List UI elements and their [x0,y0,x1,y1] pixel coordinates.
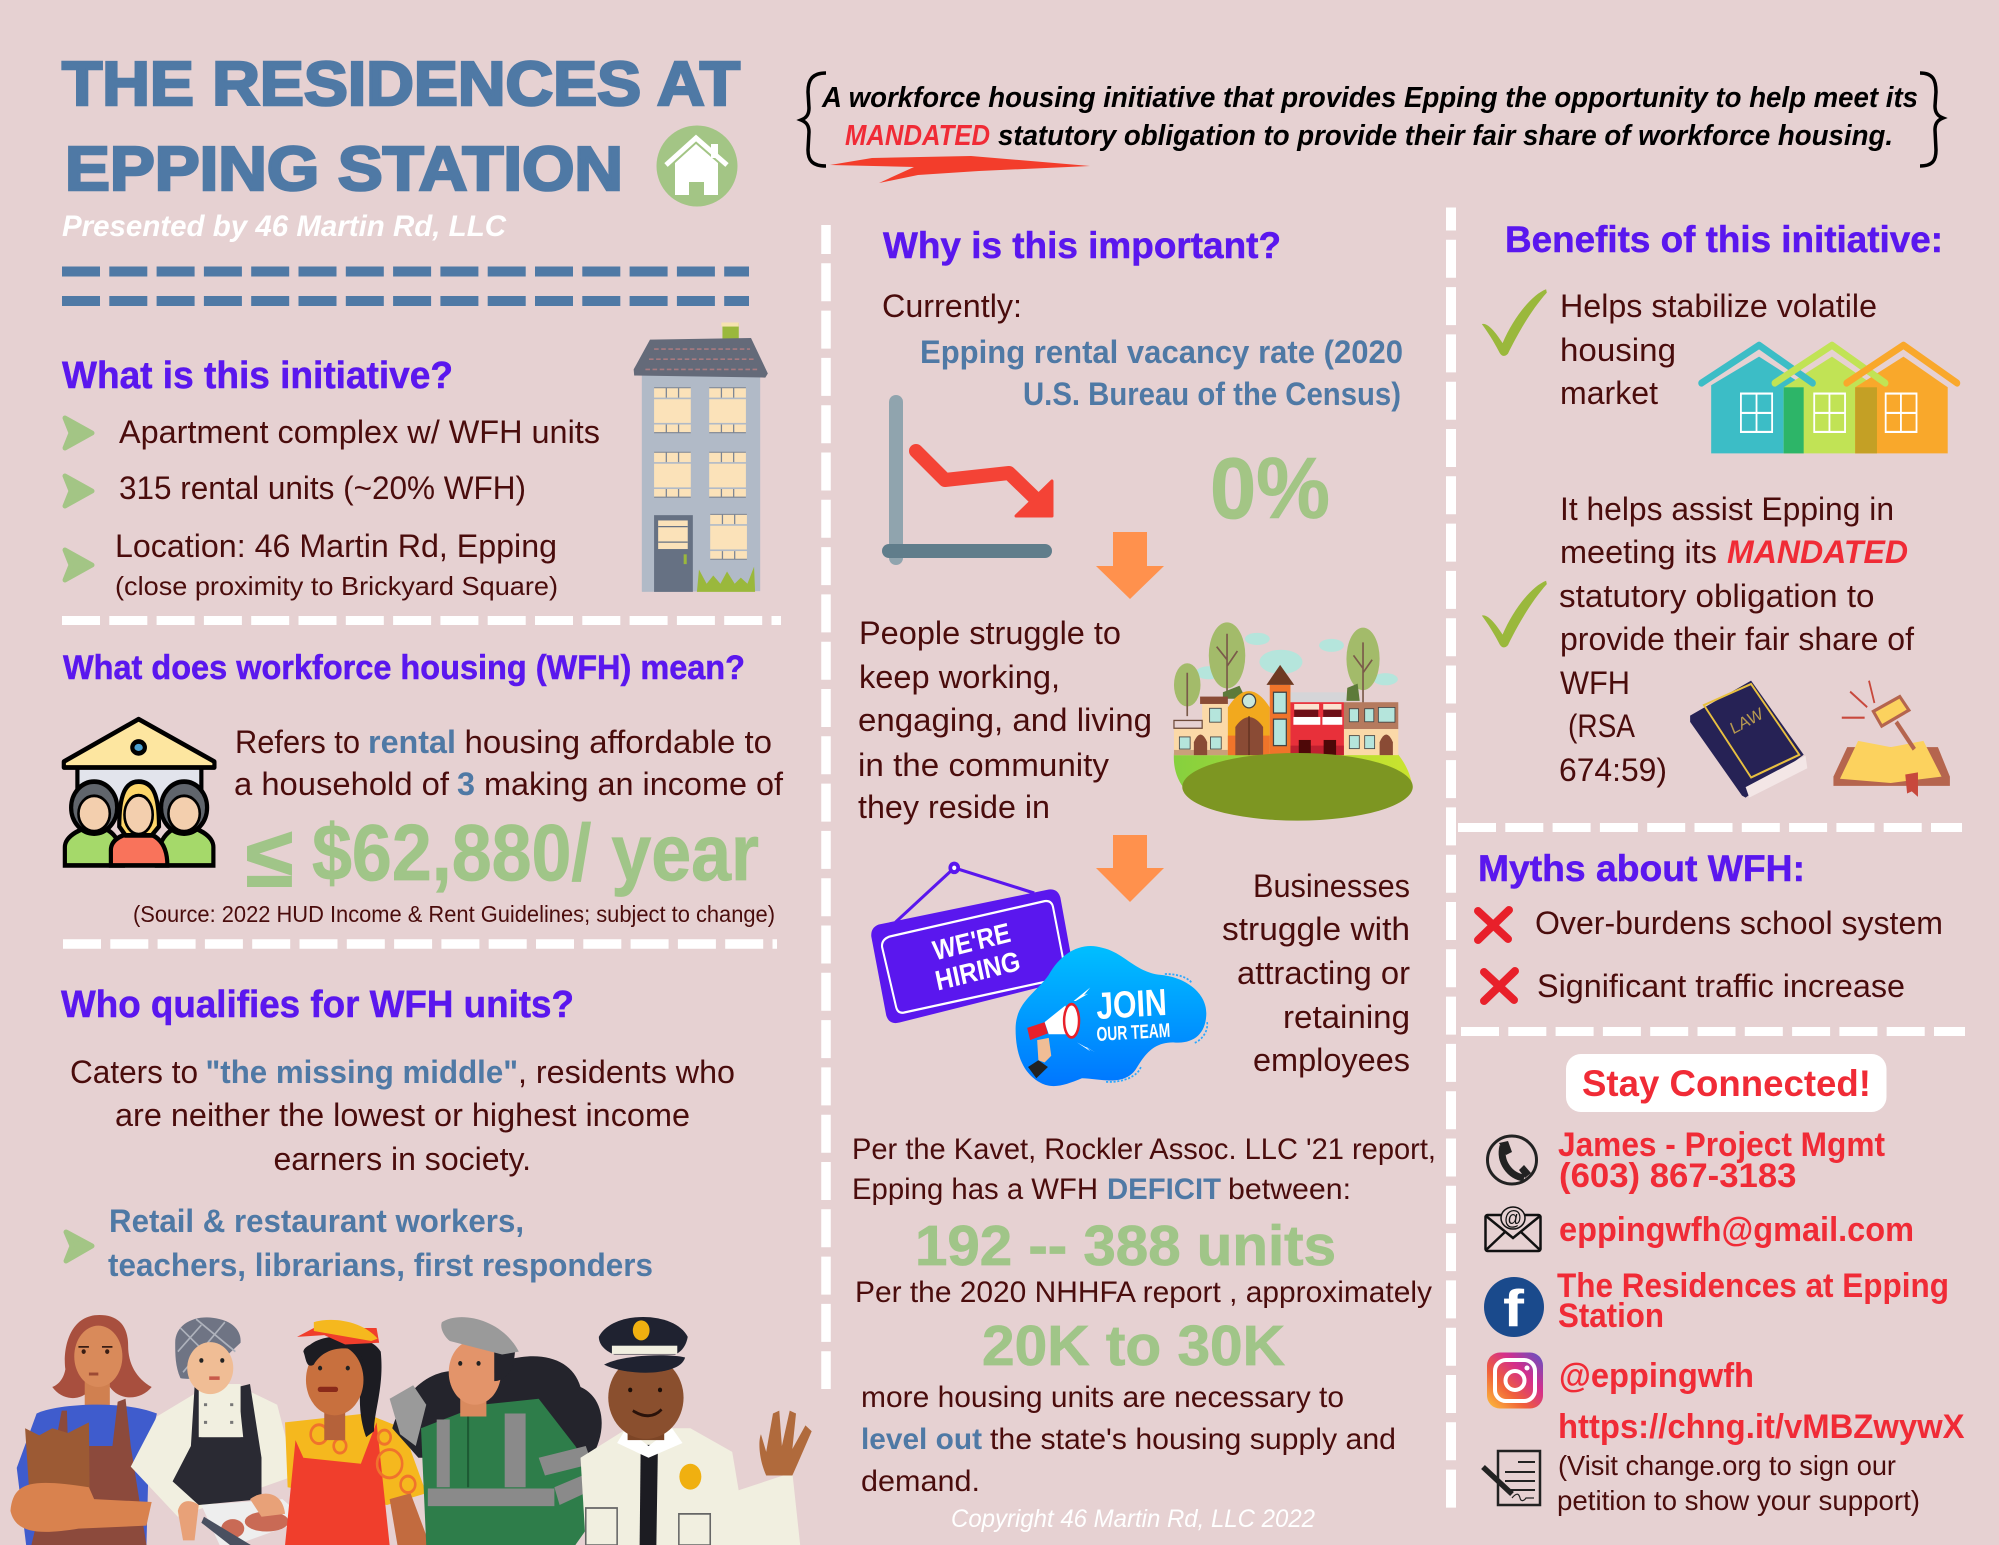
bullet list: Location: 46 Martin Rd, Epping [115,528,557,564]
section: what is this initiative [62,322,768,601]
text: Kavet Rockler report: Per the Kavet, Rockler Assoc. LLC '21 report, [852,1133,1436,1166]
definition text: 3 [457,766,475,802]
white dashed divider [1458,823,1962,832]
text: businesses struggle: retaining [1283,999,1410,1035]
text: businesses struggle: Businesses [1253,868,1410,904]
bullet list: Apartment complex w/ WFH units [119,414,600,450]
title: EPPING STATION [65,135,623,204]
icon: phone [1488,1136,1536,1184]
myth 2: Significant traffic increase [1537,968,1905,1004]
double dashed title rule [62,272,749,301]
arrow: orange down 2 [1096,835,1164,902]
text: NHHFA report: Per the 2020 NHHFA report , approximately [855,1276,1432,1309]
illustration: town [1174,622,1413,821]
text: businesses struggle: struggle with [1222,911,1410,947]
paragraph: are neither the lowest or highest income [115,1097,690,1133]
heading: Why is this important? [883,225,1281,266]
tagline text: statutory obligation to provide their fair share of workforce housing. [998,120,1893,152]
heading: Who qualifies for WFH units? [61,984,574,1026]
icon: signed petition [1483,1451,1540,1505]
subtitle: Presented by 46 Martin Rd, LLC [62,210,507,243]
white dashed divider [63,939,777,949]
icon: instagram [1487,1352,1543,1408]
text: mandated obligation: provide their fair share of [1560,621,1914,657]
section: who qualifies [10,984,812,1545]
left brace [801,73,826,166]
income limit figure: ≤ [246,810,293,904]
icon: red x 1 [1478,910,1509,940]
copyright: Copyright 46 Martin Rd, LLC 2022 [951,1505,1315,1533]
contact: phone [1558,1126,1885,1195]
text: mandated obligation: statutory obligation to [1559,578,1874,614]
text: businesses struggle: employees [1253,1042,1410,1078]
contact: phone: James - Project Mgmt [1558,1126,1885,1164]
section: benefits [1482,219,1957,798]
worker: chef [131,1317,306,1545]
bullet: occupations: Retail & restaurant workers, [109,1203,524,1239]
panel: middle column [852,225,1436,1533]
text: mandated obligation: MANDATED [1727,534,1908,570]
paragraph: earners in society. [274,1141,531,1177]
title [62,50,740,204]
red brush stroke [830,156,1090,183]
bullet list [65,414,600,601]
text: Kavet Rockler report [852,1133,1436,1206]
text: Kavet Rockler report: DEFICIT [1107,1173,1221,1206]
vacancy rate label: U.S. Bureau of the Census) [1023,376,1401,412]
text: level out [861,1381,1396,1498]
bullet: occupations: teachers, librarians, first responders [108,1247,653,1283]
text: people struggle: in the community [858,747,1109,783]
petition note: petition to show your support) [1557,1485,1920,1516]
petition note [1557,1450,1920,1516]
contact: phone: (603) 867-3183 [1559,1157,1796,1195]
text: stabilize market: housing [1560,332,1676,368]
vacancy rate label [920,334,1403,412]
panel: right column [1458,219,1965,1516]
text: stabilize market [1560,288,1877,411]
stat: deficit units: 192 -- 388 units [915,1214,1336,1278]
paragraph [70,1054,735,1177]
contact: facebook page: The Residences at Epping [1557,1267,1949,1305]
icon: green house badge [656,126,738,206]
illustration: five workers [10,1315,812,1545]
icon: envelope [1486,1207,1540,1251]
text: Kavet Rockler report: between: [1228,1173,1351,1206]
icon: facebook [1484,1277,1544,1338]
illustration: we're hiring sign: HIRING [932,945,1023,997]
illustration: join our team badge: JOIN [1095,981,1168,1027]
source note: (Source: 2022 HUD Income & Rent Guidelines; subject to change) [133,901,775,927]
icon: declining line chart [882,395,1052,565]
icon: facebook: f [1503,1280,1525,1338]
heading: Benefits of this initiative: [1505,219,1943,260]
icon: checkmark 1 [1482,289,1547,356]
text: mandated obligation [1559,491,1914,788]
icon: law book: LAW [1728,705,1766,738]
illustration: we're hiring sign [871,862,1074,1023]
text: mandated obligation: (RSA [1568,708,1636,744]
icon: red x 2 [1484,971,1515,1001]
contact: facebook page [1557,1267,1949,1335]
text: stabilize market: Helps stabilize volatile [1560,288,1877,324]
stat: state units: 20K to 30K [982,1314,1285,1378]
text: stabilize market: market [1560,375,1658,411]
text: mandated obligation: It helps assist Epping in [1560,491,1894,527]
icon: law book [1690,681,1807,798]
text: level out: demand. [861,1465,980,1498]
text: people struggle [858,615,1152,825]
icon: envelope: @ [1504,1208,1522,1230]
vacancy rate label: Epping rental vacancy rate (2020 [920,334,1403,370]
income limit figure: $62,880/ year [312,808,759,897]
heading: Myths about WFH: [1478,848,1805,889]
icon: checkmark 2 [1482,581,1547,647]
stay connected badge: Stay Connected! [1582,1063,1871,1104]
text: mandated obligation: WFH [1560,665,1630,701]
text: businesses struggle: attracting or [1237,955,1410,991]
worker: server in red apron [285,1320,430,1545]
bullet list: (close proximity to Brickyard Square) [115,571,558,601]
definition text: rental [368,724,456,760]
section: stay connected [1483,1054,1965,1516]
paragraph: "the missing middle" [206,1054,518,1090]
definition text: housing affordable to [464,724,772,760]
text: people struggle: engaging, and living [858,702,1152,738]
text: mandated obligation: meeting its [1560,534,1717,570]
panel: left column [10,50,812,1545]
contact: email: eppingwfh@gmail.com [1559,1211,1914,1249]
icon: family under roof [64,719,214,865]
white dashed column separators [826,208,1451,1509]
worker: sanitation in green uniform [390,1317,608,1545]
text: level out: the state's housing supply and [990,1423,1396,1456]
worker: police officer waving [581,1317,812,1545]
tagline text [821,82,1918,152]
icon: gavel and open book [1833,681,1950,797]
section: myths [1478,848,1943,1004]
text: mandated obligation: 674:59) [1559,752,1667,788]
illustration: join our team badge: OUR TEAM [1096,1020,1171,1046]
contact: facebook page: Station [1558,1297,1664,1335]
text: businesses struggle [1222,868,1410,1078]
arrow: orange down 1 [1096,532,1164,599]
label: currently: Currently: [882,288,1022,324]
icon: three colored houses [1701,345,1957,453]
myth 1: Over-burdens school system [1535,905,1943,941]
tagline text: MANDATED [845,120,990,152]
illustration: we're hiring sign: WE'RE [930,917,1013,967]
tagline text: A workforce housing initiative that provides Epping the opportunity to help meet its [821,82,1918,114]
paragraph: Caters to [70,1054,198,1090]
title: THE RESIDENCES AT [62,50,740,119]
bullet: occupations [66,1203,653,1283]
text: people struggle: keep working, [859,659,1060,695]
heading: What is this initiative? [62,355,453,397]
text: level out: level out [861,1423,982,1456]
definition text: Refers to [235,724,360,760]
bullet list: 315 rental units (~20% WFH) [119,470,526,506]
contact: petition link: https://chng.it/vMBZwywX [1558,1408,1965,1446]
text: Kavet Rockler report: Epping has a WFH [852,1173,1098,1206]
definition text: making an income of [484,766,783,802]
paragraph: , residents who [518,1054,735,1090]
text: people struggle: People struggle to [859,615,1121,651]
section: what does WFH mean [63,649,783,927]
white dashed divider [1461,1027,1965,1036]
heading: What does workforce housing (WFH) mean? [63,649,745,687]
icon: apartment building [634,322,768,592]
text: people struggle: they reside in [858,789,1050,825]
definition text: a household of [234,766,449,802]
definition text [234,724,783,802]
text: level out: more housing units are necessary to [861,1381,1344,1414]
petition note: (Visit change.org to sign our [1558,1450,1896,1481]
stat: 0 percent: 0% [1210,441,1330,537]
right brace [1920,73,1943,166]
tagline with braces [801,73,1943,183]
white dashed divider [62,616,781,625]
worker: grocer [10,1315,157,1545]
stay connected badge [1566,1054,1886,1112]
illustration: join our team badge [1016,946,1207,1086]
contact: instagram: @eppingwfh [1559,1357,1754,1395]
